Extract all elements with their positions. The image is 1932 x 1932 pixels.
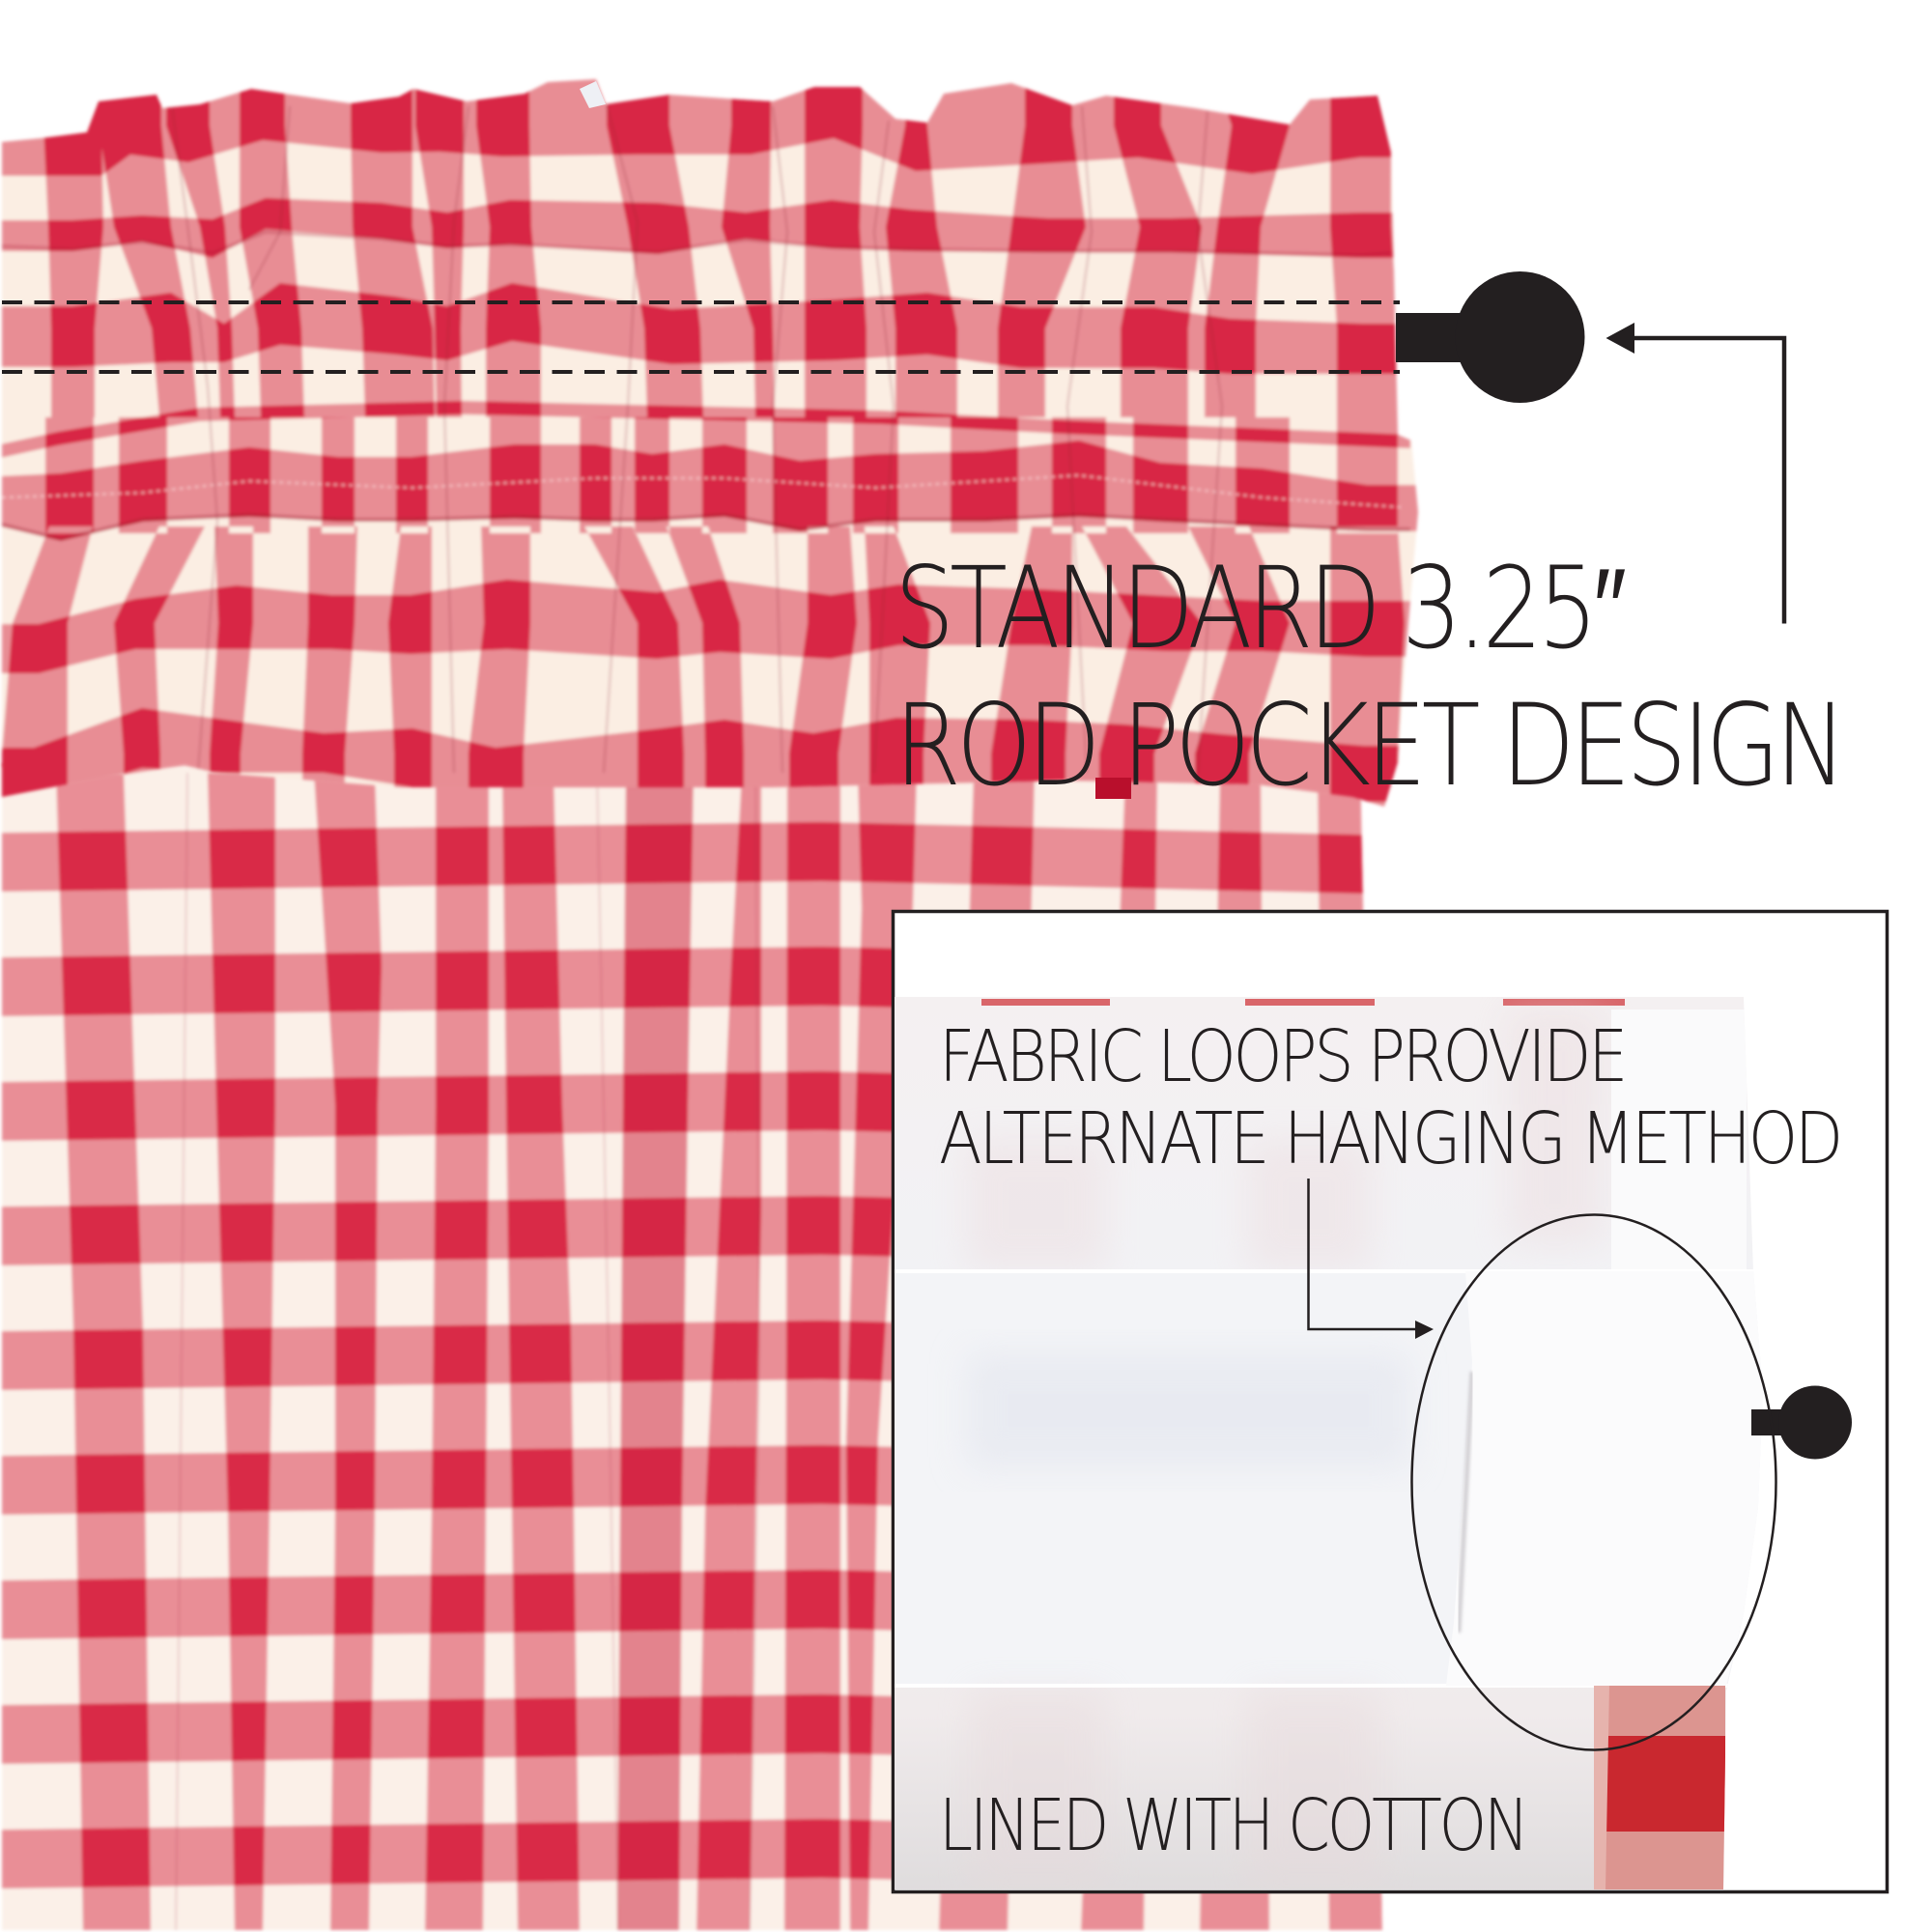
dashed line: bottom of rod pocket (2, 370, 1400, 374)
red fabric peeking at top edge (981, 999, 1625, 1006)
white edge of lining, top right (1611, 1009, 1747, 1271)
panel: lower curtain gingham fabric (0, 697, 1401, 1932)
heading: standard rod pocket: STANDARD 3.25″ (895, 542, 1626, 674)
fabric loop pocket (1594, 1683, 1725, 1686)
icon: curtain rod with finial (1396, 271, 1584, 403)
red corner of curtain front (1595, 1683, 1725, 1890)
faint blue print through lining (980, 1366, 1396, 1455)
stitching on ruffle (2, 475, 1401, 507)
arrow: points to rod finial (1605, 323, 1784, 624)
dark red tab under valance (1095, 778, 1131, 799)
lining notch at valance top (580, 81, 606, 108)
callout: ellipse around fabric loop (1412, 1215, 1776, 1750)
gather stitching (2, 232, 1391, 255)
lining pale hem band (895, 1573, 1737, 1684)
panel: lining photo (889, 995, 1768, 1893)
text: fabric loops (939, 1015, 1840, 1180)
panel: gathered rod pocket valance (0, 68, 1430, 821)
faint check through lining, top (966, 1009, 1604, 1271)
ruffle shadow (2, 515, 1410, 539)
text: fabric loops: ALTERNATE HANGING METHOD (939, 1097, 1840, 1180)
faint check through lining, bottom (971, 1690, 1381, 1889)
panel: lining inset frame (893, 912, 1888, 1891)
dashed line: top of rod pocket (2, 300, 1400, 304)
arrow: label to fabric loop (1308, 1179, 1434, 1339)
fold lines (172, 104, 1222, 773)
text: lined with cotton: LINED WITH COTTON (939, 1784, 1526, 1867)
icon: inset rod with finial (1751, 1385, 1852, 1459)
shadow beside loop (1459, 1372, 1472, 1633)
hem seams (895, 1271, 1758, 1686)
text: fabric loops: FABRIC LOOPS PROVIDE (939, 1015, 1625, 1098)
heading: standard rod pocket (895, 542, 1842, 811)
